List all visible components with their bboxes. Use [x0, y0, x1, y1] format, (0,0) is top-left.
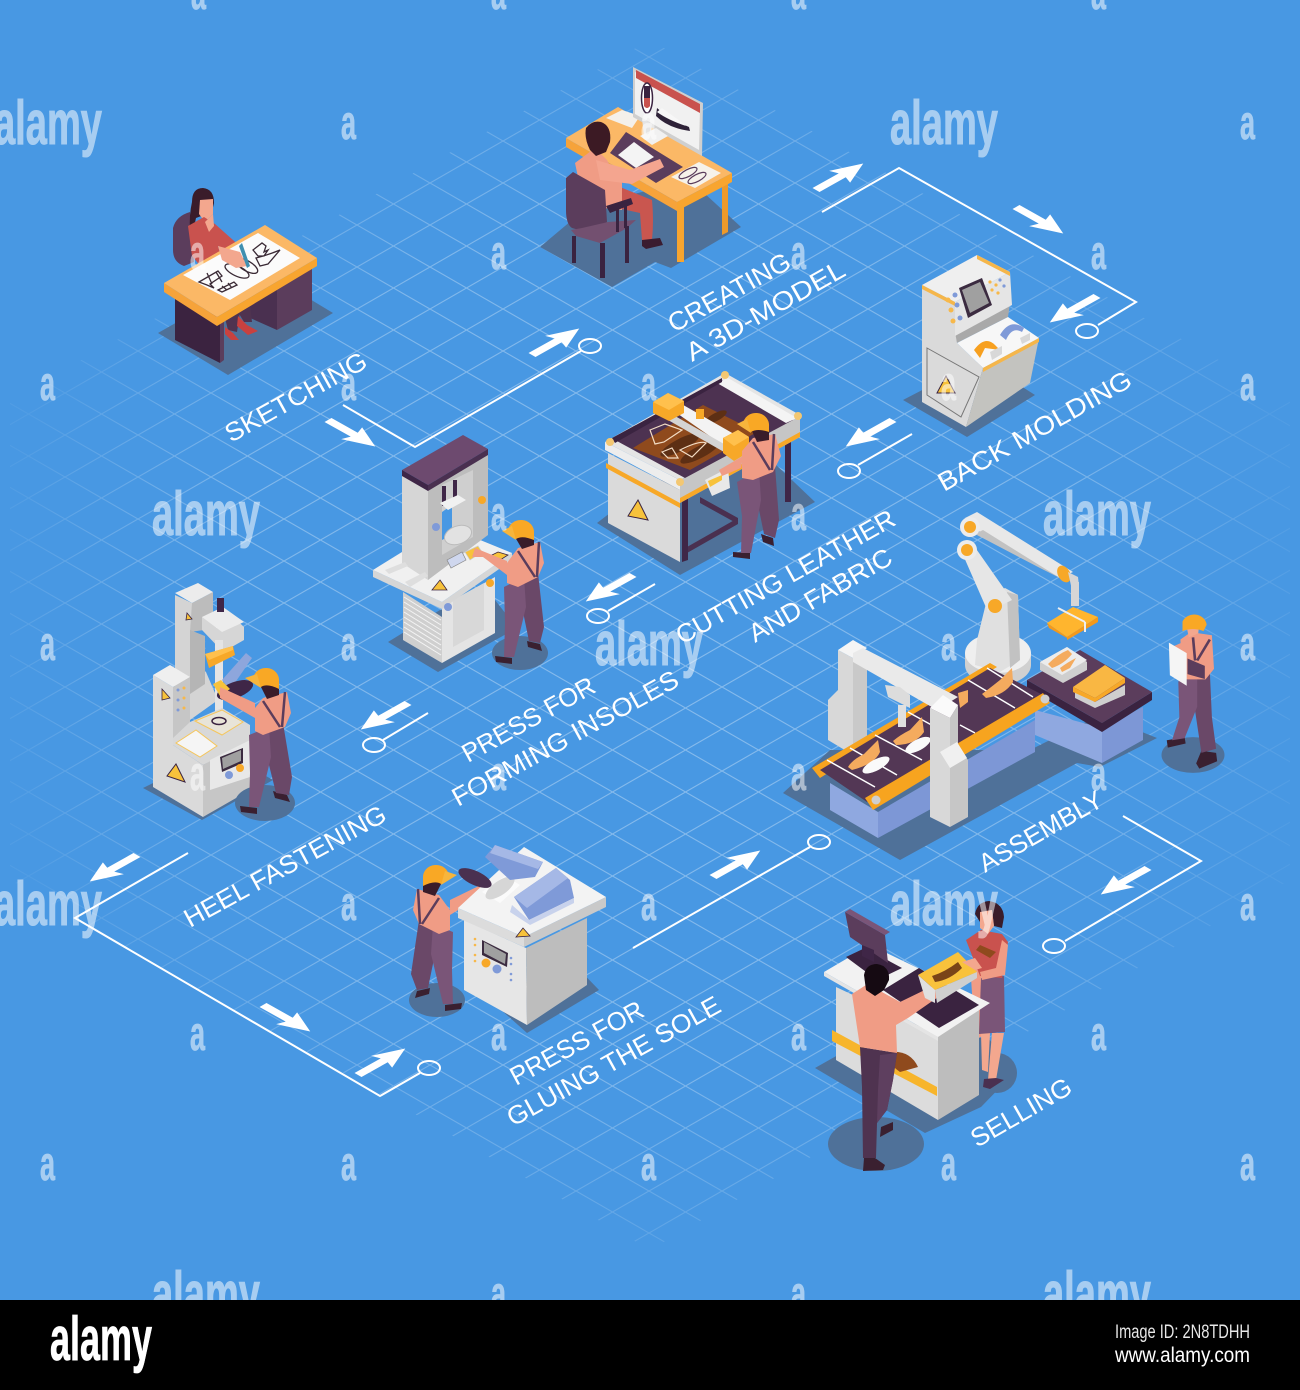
watermark pattern: a	[1240, 358, 1255, 411]
watermark pattern: alamy	[595, 610, 703, 679]
connector: back molding to cutting	[835, 414, 912, 478]
watermark pattern: a	[641, 358, 656, 411]
watermark pattern: a	[40, 1138, 55, 1191]
watermark pattern: a	[1240, 97, 1255, 150]
label: press for gluing the sole: PRESS FOR	[505, 994, 649, 1091]
label: creating a 3D-model	[662, 246, 850, 367]
connector: sketching to 3D model	[318, 323, 601, 452]
connector: 3D model to back molding	[806, 158, 1136, 338]
label: press for forming insoles: PRESS FOR	[456, 670, 600, 768]
watermark pattern: a	[40, 618, 55, 671]
watermark pattern: a	[341, 878, 356, 931]
watermark pattern: alamy	[152, 1260, 260, 1329]
watermark pattern: alamy	[890, 89, 998, 158]
watermark pattern: a	[190, 1008, 205, 1061]
watermark pattern: a	[791, 227, 806, 280]
label: heel fastening: HEEL FASTENING	[179, 799, 391, 933]
watermark pattern: alamy	[1043, 480, 1151, 549]
label: cutting leather and fabric: AND FABRIC	[743, 542, 897, 648]
watermark pattern: alamy	[152, 480, 260, 549]
watermark pattern: a	[1091, 748, 1106, 801]
illustration: selling counter with customer and clerk	[815, 901, 1017, 1171]
label: selling: SELLING	[965, 1071, 1077, 1153]
illustration: sketching desk	[158, 188, 333, 375]
watermark pattern: a	[941, 1138, 956, 1191]
watermark pattern: a	[491, 1268, 506, 1321]
watermark pattern: a	[941, 618, 956, 671]
watermark pattern: a	[791, 1008, 806, 1061]
watermark pattern: a	[791, 1268, 806, 1321]
watermark pattern: a	[341, 358, 356, 411]
watermark pattern: a	[791, 488, 806, 541]
watermark pattern: a	[190, 227, 205, 280]
watermark pattern: a	[40, 358, 55, 411]
connector: cutting to insole press	[575, 569, 655, 623]
watermark pattern: a	[1091, 227, 1106, 280]
watermark pattern: a	[1240, 878, 1255, 931]
illustration: cutting table with worker	[597, 371, 815, 575]
label: sketching: SKETCHING	[219, 345, 372, 448]
watermark pattern: alamy	[1043, 1260, 1151, 1329]
watermark pattern: a	[1240, 618, 1255, 671]
watermark pattern: a	[941, 358, 956, 411]
label: assembly: ASSEMBLY	[973, 784, 1108, 878]
watermark pattern: a	[341, 97, 356, 150]
footer band: alamy	[50, 1305, 152, 1374]
watermark pattern: a	[491, 1008, 506, 1061]
watermark pattern: a	[1091, 1008, 1106, 1061]
label: cutting leather and fabric: CUTTING LEATHER	[670, 503, 900, 650]
label: press for forming insoles: FORMING INSOLES	[446, 664, 684, 812]
watermark pattern: a	[491, 748, 506, 801]
footer band: Image ID: 2N8TDHH	[1115, 1322, 1250, 1343]
connector: insole press to heel fastening	[350, 697, 428, 752]
connector: assembly to selling	[1043, 816, 1201, 953]
watermark pattern: a	[641, 878, 656, 931]
watermark pattern: alamy	[890, 870, 998, 939]
watermark pattern: a	[641, 97, 656, 150]
footer band	[0, 1300, 1300, 1390]
watermark pattern: a	[190, 748, 205, 801]
illustration: heel fastening machine with worker	[143, 583, 295, 821]
watermark pattern: a	[491, 227, 506, 280]
label: back molding: BACK MOLDING	[932, 364, 1137, 497]
watermark pattern: a	[641, 1138, 656, 1191]
label: creating a 3D-model: CREATING	[662, 246, 796, 338]
watermark pattern: a	[791, 748, 806, 801]
watermark pattern: a	[491, 488, 506, 541]
label: creating a 3D-model: A 3D-MODEL	[680, 254, 850, 367]
label: press for gluing the sole: GLUING THE SOLE	[501, 990, 726, 1132]
watermark pattern: a	[341, 1138, 356, 1191]
illustration: 3D model workstation	[540, 67, 741, 287]
illustration: back molding machine	[903, 255, 1039, 437]
illustration: assembly line with robot arm and worker	[783, 512, 1224, 860]
illustration: press for forming insoles with worker	[373, 435, 548, 672]
footer band: www.alamy.com	[1114, 1344, 1250, 1367]
connector: sole press to assembly	[633, 835, 830, 948]
illustration: press for gluing the sole with worker	[409, 845, 606, 1033]
connector: heel fastening to sole press	[75, 849, 440, 1096]
watermark pattern: a	[341, 618, 356, 671]
watermark pattern: a	[1240, 1138, 1255, 1191]
